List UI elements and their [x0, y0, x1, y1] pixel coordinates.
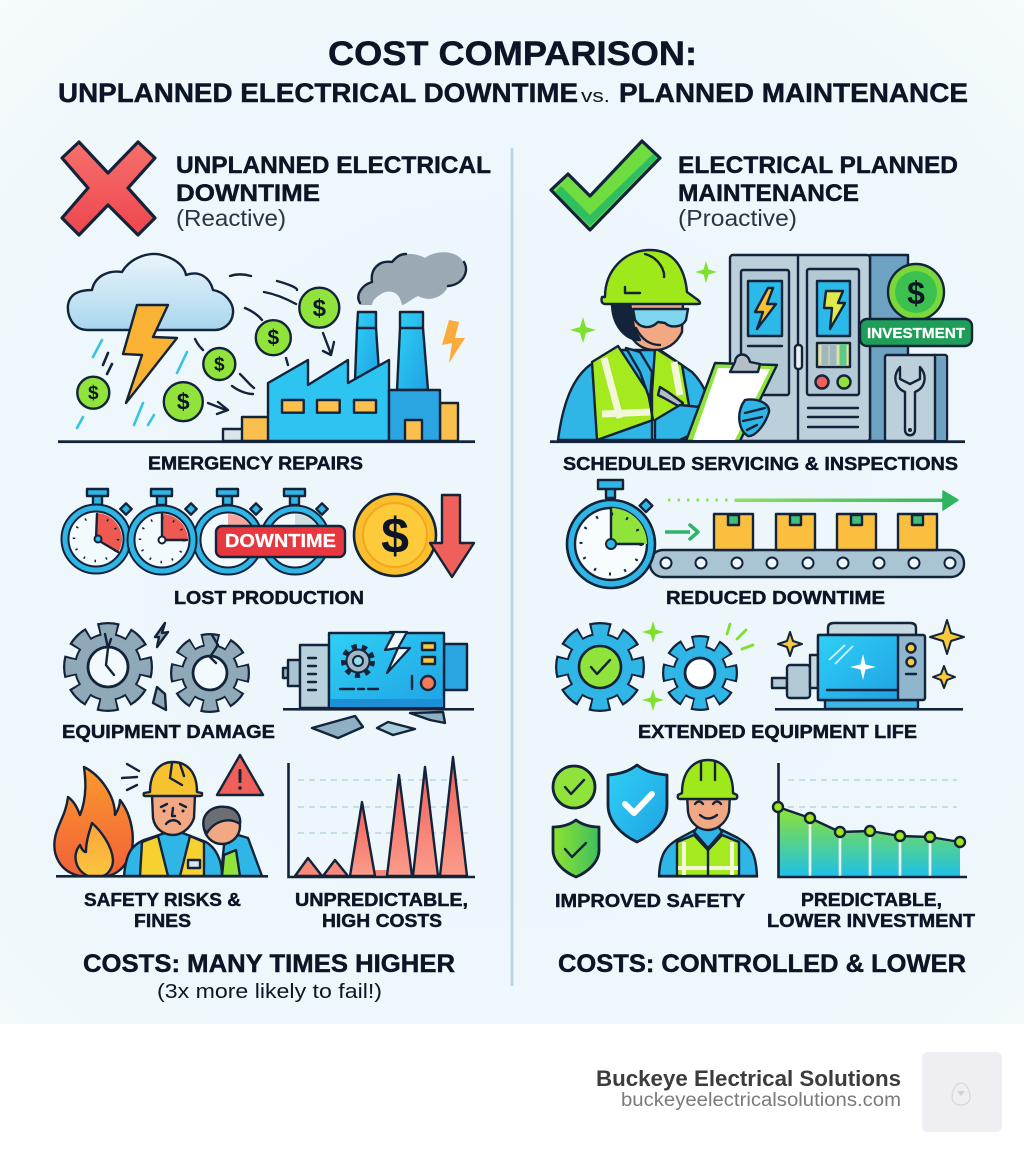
- icon: investment coin: [888, 264, 944, 320]
- label: lost production: LOST PRODUCTION: [174, 588, 364, 608]
- ground line: [550, 440, 965, 443]
- small buildings: [223, 403, 458, 441]
- label: safety risks and fines: FINES: [134, 911, 191, 931]
- falling money coins: $: [313, 295, 327, 322]
- illustration: technician and electrical panel: [558, 250, 972, 441]
- blue shield: [608, 765, 667, 842]
- rain streaks: [77, 340, 187, 428]
- title: UNPLANNED ELECTRICAL DOWNTIME: [58, 78, 578, 108]
- alarm marks: [122, 764, 139, 790]
- factory chimneys: [355, 312, 428, 390]
- illustration: improved safety: [553, 760, 758, 878]
- gear one: [73, 632, 143, 702]
- heading: unplanned downtime: [176, 152, 491, 231]
- stopwatch four: [264, 489, 328, 571]
- badge: investment: [860, 319, 972, 346]
- small orange spark: [442, 320, 465, 363]
- plain blue gear: [671, 644, 729, 702]
- heading: planned maintenance: MAINTENANCE: [678, 180, 859, 207]
- heading: planned maintenance: ELECTRICAL PLANNED: [678, 152, 958, 179]
- icon: warning triangle: [217, 755, 263, 795]
- sparkles: [570, 261, 717, 343]
- label: predictable lower investment: [767, 890, 975, 931]
- badge: downtime: [216, 526, 345, 557]
- stopwatch two: [131, 489, 197, 571]
- chart: unpredictable cost spikes: [288, 757, 475, 877]
- falling money coins: $: [177, 388, 190, 414]
- icon: lightning bolt: [123, 305, 177, 403]
- label: extended equipment life: EXTENDED EQUIPMENT LIFE: [638, 721, 917, 742]
- factory: [268, 360, 389, 441]
- footer brand text: [596, 1066, 901, 1111]
- footer logo placeholder: [922, 1052, 1002, 1132]
- stopwatch three: [197, 489, 262, 571]
- smiling worker: [659, 760, 757, 876]
- title: PLANNED MAINTENANCE: [619, 78, 968, 108]
- stopwatch: [567, 480, 655, 588]
- ground line: [58, 440, 475, 443]
- check badge: [553, 766, 595, 808]
- illustration: safety risks: [54, 755, 268, 878]
- gear two: [180, 635, 240, 703]
- heading: planned maintenance: (Proactive): [678, 205, 797, 231]
- label: improved safety: IMPROVED SAFETY: [555, 890, 746, 911]
- motion arrows: [195, 274, 334, 414]
- conveyor belt: [650, 550, 964, 577]
- title: COST COMPARISON:: [328, 35, 697, 73]
- illustration: broken gears: [73, 623, 240, 710]
- icon: investment coin: $: [907, 275, 925, 311]
- falling money coins: $: [88, 383, 99, 404]
- heading: unplanned downtime: DOWNTIME: [176, 180, 320, 207]
- icon: storm cloud: [68, 254, 233, 330]
- factory annex: [389, 390, 440, 441]
- icon: gold coin: [354, 494, 436, 576]
- illustration: stopwatches and downtime: [65, 489, 474, 577]
- heading: unplanned downtime: UNPLANNED ELECTRICAL: [176, 152, 491, 179]
- clipboard: [686, 354, 777, 441]
- electrical cabinet: [730, 255, 908, 441]
- green sparkles: [642, 621, 753, 711]
- arrows: [665, 491, 958, 539]
- falling money coins: [77, 288, 339, 421]
- label: scheduled servicing: SCHEDULED SERVICING & INSPECTIONS: [563, 453, 958, 474]
- badge: downtime: DOWNTIME: [225, 531, 336, 551]
- gear fragments: [153, 623, 168, 710]
- icon: red X: [62, 142, 155, 235]
- icon: green check: [551, 141, 660, 230]
- illustration: healthy gears: [565, 621, 753, 711]
- machine shards: [312, 712, 445, 738]
- footer brand text: Buckeye Electrical Solutions: [596, 1066, 901, 1091]
- label: unpredictable high costs: UNPREDICTABLE,: [295, 890, 468, 910]
- title: [58, 35, 968, 108]
- icon: flame: [54, 767, 133, 876]
- second worker: [203, 807, 262, 876]
- icon: red down arrow: [430, 495, 474, 577]
- illustration: reduced downtime conveyor: [567, 480, 964, 588]
- green shield: [553, 820, 599, 877]
- falling money coins: $: [267, 326, 279, 350]
- callout: costs many times higher: (3x more likely to fail!): [157, 981, 382, 1003]
- label: safety risks and fines: [84, 890, 241, 931]
- label: predictable lower investment: PREDICTABLE,: [801, 890, 942, 910]
- title: vs.: [581, 86, 610, 106]
- label: unpredictable high costs: [295, 890, 468, 931]
- label: emergency repairs: EMERGENCY REPAIRS: [148, 454, 363, 474]
- illustration: storm and factory: [68, 252, 466, 441]
- heading: unplanned downtime: (Reactive): [176, 205, 286, 231]
- callout: costs many times higher: COSTS: MANY TIMES HIGHER: [83, 950, 455, 978]
- label: reduced downtime: REDUCED DOWNTIME: [666, 588, 885, 608]
- callout: costs controlled and lower: COSTS: CONTROLLED & LOWER: [558, 950, 966, 978]
- worried worker: [124, 762, 222, 876]
- illustration: damaged machine: [283, 632, 474, 738]
- label: unpredictable high costs: HIGH COSTS: [322, 911, 442, 931]
- falling money coins: $: [214, 354, 225, 376]
- stopwatch one: [65, 489, 132, 570]
- technician: [558, 250, 712, 440]
- heading: planned maintenance: [678, 152, 958, 231]
- label: predictable lower investment: LOWER INVESTMENT: [767, 911, 975, 931]
- boxes on conveyor: [714, 514, 937, 550]
- tool cabinet with wrench: [885, 355, 947, 441]
- badge: investment: INVESTMENT: [867, 325, 965, 342]
- gear with check: [565, 632, 635, 702]
- footer brand text: buckeyeelectricalsolutions.com: [621, 1090, 901, 1111]
- label: safety risks and fines: SAFETY RISKS &: [84, 890, 241, 910]
- factory door and windows: [282, 400, 422, 441]
- gold sparkles: [778, 620, 964, 688]
- chart: predictable lower investment: [773, 763, 967, 877]
- callout: costs many times higher: [83, 950, 455, 1003]
- illustration: like-new machine: [772, 620, 964, 711]
- smoke: [358, 252, 466, 305]
- label: equipment damage: EQUIPMENT DAMAGE: [62, 721, 275, 742]
- icon: gold coin: $: [381, 508, 409, 564]
- central divider: [510, 148, 514, 986]
